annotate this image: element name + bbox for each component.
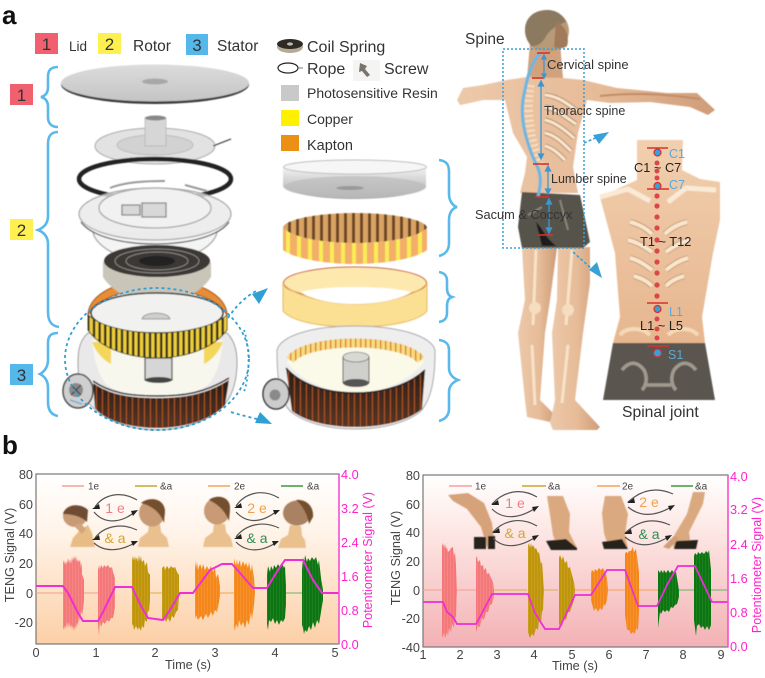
left axis: 40 xyxy=(19,527,33,541)
left axis: 0 xyxy=(413,584,420,598)
right axis potentiometer: 2.4 xyxy=(730,538,748,552)
motion arrows and labels: & a xyxy=(246,530,268,546)
dashed selection ellipse xyxy=(65,288,249,430)
motion arrows and labels: & a xyxy=(638,526,660,542)
black ring xyxy=(79,159,231,199)
left axis: 80 xyxy=(406,469,420,483)
spine labels: S1 xyxy=(668,348,683,362)
chart legend: &a xyxy=(160,482,173,492)
spine curve xyxy=(522,53,540,197)
chart: neck motion xyxy=(3,468,375,672)
coil spring xyxy=(103,245,211,303)
chart legend: 1e xyxy=(475,482,487,492)
left axis: 40 xyxy=(406,526,420,540)
right braces xyxy=(439,160,458,421)
motion arrows and labels: 1 e xyxy=(105,500,125,516)
left axis: -20 xyxy=(15,616,33,630)
right axis potentiometer: 3.2 xyxy=(341,502,359,516)
right axis potentiometer: 0.8 xyxy=(341,604,359,618)
left labels and braces: 2 xyxy=(17,221,26,240)
expanded parts column xyxy=(263,160,435,429)
left axis: 0 xyxy=(26,587,33,601)
dotted spine selection box xyxy=(503,49,584,248)
top legend: lid rotor stator: Lid xyxy=(69,39,87,54)
top legend: lid rotor stator: Stator xyxy=(217,38,258,55)
icon: coil spring xyxy=(277,39,303,53)
rotor back ring xyxy=(88,279,227,315)
stator housing xyxy=(78,333,237,430)
top legend: lid rotor stator: 2 xyxy=(105,35,114,54)
spine labels xyxy=(465,31,699,421)
spine labels: L1 xyxy=(669,305,683,319)
baseline signal xyxy=(36,592,339,594)
chart legend: 2e xyxy=(234,482,246,492)
left axis: 60 xyxy=(406,498,420,512)
spine labels: C1 ~ C7 xyxy=(634,160,681,175)
left axis: 6 xyxy=(605,648,613,662)
left axis: 4 xyxy=(271,646,279,660)
right axis potentiometer: 3.2 xyxy=(730,503,748,517)
motion arrows and labels: 1 e xyxy=(505,495,525,511)
right axis potentiometer: 2.4 xyxy=(341,536,359,550)
left axis: 20 xyxy=(406,555,420,569)
spine labels: C7 xyxy=(669,178,685,192)
panel letter b: b xyxy=(2,430,18,460)
motion arrows and labels xyxy=(491,490,675,546)
left axis: 2 xyxy=(151,646,159,660)
neck illustrations xyxy=(63,497,313,548)
spine labels: C1 xyxy=(669,147,685,161)
motion arrows and labels: 2 e xyxy=(247,500,267,516)
left axis: 0 xyxy=(32,646,40,660)
material legend: Screw xyxy=(384,61,429,78)
signal bursts xyxy=(442,543,711,638)
plot background xyxy=(36,474,339,644)
chart legend xyxy=(62,482,320,492)
top legend: lid rotor stator: Rotor xyxy=(133,38,171,55)
exploded device stack xyxy=(61,64,249,430)
left axis: 5 xyxy=(331,646,339,660)
rotor copper band xyxy=(88,293,227,358)
motion arrows and labels: & a xyxy=(504,525,526,541)
transparent housing xyxy=(79,181,231,262)
left axis: 4 xyxy=(530,648,538,662)
left axis: -20 xyxy=(402,612,420,626)
potentiometer line xyxy=(423,566,728,629)
material legend: Kapton xyxy=(307,138,353,154)
material legend: Rope xyxy=(307,61,345,78)
chart legend: &a xyxy=(548,482,561,492)
left axis: 5 xyxy=(568,648,576,662)
kapton ring part xyxy=(283,267,427,327)
left axis: 1 xyxy=(92,646,100,660)
back torso xyxy=(600,140,720,343)
chart: trunk motion xyxy=(389,469,764,673)
right axis potentiometer: 4.0 xyxy=(730,470,748,484)
material legend: Photosensitive Resin xyxy=(307,85,438,101)
right axis potentiometer: 1.6 xyxy=(730,572,748,586)
chart legend: &a xyxy=(307,482,320,492)
motion arrows and labels: 2 e xyxy=(639,494,659,510)
top legend: lid rotor stator: 3 xyxy=(192,36,202,55)
panel a: device and spine xyxy=(2,0,720,430)
right axis potentiometer xyxy=(728,470,764,654)
right axis potentiometer: Potentiometer Signal (V) xyxy=(361,492,375,628)
top legend: lid rotor stator: 1 xyxy=(42,35,51,54)
left axis: 80 xyxy=(19,468,33,482)
left labels and braces: 3 xyxy=(17,366,26,385)
copper band part xyxy=(283,213,427,264)
left axis: 7 xyxy=(642,648,650,662)
left axis: 1 xyxy=(419,648,427,662)
side screw knob xyxy=(63,374,93,408)
left axis: 9 xyxy=(717,648,725,662)
spine dots xyxy=(654,160,660,340)
rotor shaft disc xyxy=(95,116,231,164)
chart legend: 1e xyxy=(88,482,100,492)
signal bursts xyxy=(63,555,323,636)
spinal back inset xyxy=(600,140,720,400)
arrows to expanded stator xyxy=(228,288,272,424)
spine labels: L1 ~ L5 xyxy=(640,318,683,333)
icon: screw xyxy=(353,60,380,81)
spine joint markers xyxy=(647,148,669,357)
spine labels: Cervical spine xyxy=(547,57,629,72)
potentiometer line xyxy=(36,560,339,621)
left axis: 3 xyxy=(493,648,501,662)
left axis: 20 xyxy=(19,557,33,571)
resin dish xyxy=(283,160,426,199)
material legend: Copper xyxy=(307,111,353,127)
spine labels: Lumber spine xyxy=(551,172,627,186)
baseline signal xyxy=(423,589,728,591)
left axis: TENG Signal (V) xyxy=(3,508,17,602)
left axis: -40 xyxy=(402,641,420,655)
chart legend: 2e xyxy=(622,482,634,492)
left labels and braces xyxy=(10,67,59,416)
lid disc xyxy=(61,64,249,104)
left axis: TENG Signal (V) xyxy=(389,511,403,605)
spine section markers xyxy=(532,53,553,235)
chart legend xyxy=(449,482,708,492)
left labels and braces: 1 xyxy=(17,86,26,105)
plot background xyxy=(423,475,728,647)
trunk illustrations xyxy=(448,492,705,550)
material legend: Coil Spring xyxy=(307,39,385,56)
left axis xyxy=(3,468,339,672)
ribs xyxy=(528,85,577,165)
left axis: 3 xyxy=(211,646,219,660)
left axis xyxy=(389,469,725,673)
right axis potentiometer: 0.0 xyxy=(730,640,748,654)
right axis potentiometer: 0.8 xyxy=(730,606,748,620)
stator part xyxy=(263,326,435,429)
right axis potentiometer: 0.0 xyxy=(341,638,359,652)
spine labels: Thoracic spine xyxy=(544,104,625,118)
head xyxy=(525,10,569,52)
standing body with spine xyxy=(457,10,715,430)
spine labels: Sacum & Coccyx xyxy=(475,207,573,222)
back shorts xyxy=(603,343,715,400)
spine labels: T1 ~ T12 xyxy=(640,234,691,249)
chart legend: &a xyxy=(695,482,708,492)
left axis: 8 xyxy=(679,648,687,662)
right axis potentiometer: 4.0 xyxy=(341,468,359,482)
motion arrows and labels xyxy=(92,493,280,550)
right axis potentiometer: 1.6 xyxy=(341,570,359,584)
icon: rope xyxy=(278,63,303,73)
material legend xyxy=(277,39,438,154)
motion arrows and labels: & a xyxy=(104,530,126,546)
right axis potentiometer: Potentiometer Signal (V) xyxy=(750,497,764,633)
spine labels: Spine xyxy=(465,31,505,48)
spine labels: Spinal joint xyxy=(622,404,699,421)
panel letter a: a xyxy=(2,0,17,30)
left axis: Time (s) xyxy=(165,658,211,672)
top legend: lid rotor stator xyxy=(35,33,258,55)
left axis: Time (s) xyxy=(552,659,598,673)
left axis: 60 xyxy=(19,498,33,512)
arrows to inset xyxy=(573,132,609,278)
left axis: 2 xyxy=(456,648,464,662)
body silhouette xyxy=(457,43,715,430)
right axis potentiometer xyxy=(339,468,375,652)
